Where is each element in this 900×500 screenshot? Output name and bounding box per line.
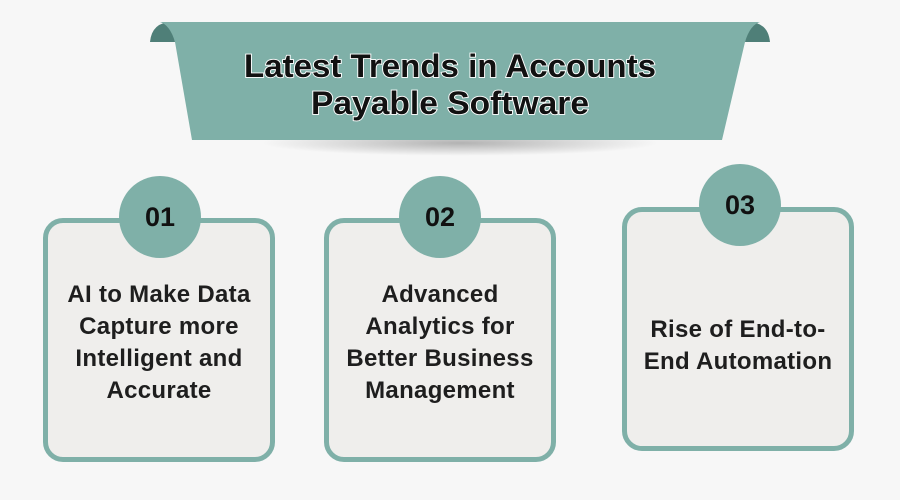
title bbox=[244, 48, 656, 121]
card 2: Management bbox=[365, 377, 515, 404]
card 1: Accurate bbox=[106, 377, 212, 404]
title: Payable Software bbox=[311, 85, 589, 121]
card 3: End Automation bbox=[644, 348, 832, 375]
badge 02 bbox=[399, 176, 481, 258]
card 3: Rise of End-to- bbox=[650, 316, 826, 343]
card 1 bbox=[43, 218, 275, 462]
card 3 bbox=[622, 207, 854, 451]
banner bbox=[150, 22, 770, 140]
title: Latest Trends in Accounts bbox=[244, 48, 656, 84]
card 1: Capture more bbox=[79, 313, 239, 340]
card 2: Analytics for bbox=[365, 313, 515, 340]
card 1: Intelligent and bbox=[75, 345, 243, 372]
card 2: Advanced bbox=[381, 281, 499, 308]
card 2 bbox=[324, 218, 556, 462]
badge 02: 02 bbox=[425, 202, 455, 232]
badge 01 bbox=[119, 176, 201, 258]
badge 03: 03 bbox=[725, 190, 755, 220]
badge 01: 01 bbox=[145, 202, 175, 232]
badge 03 bbox=[699, 164, 781, 246]
banner shadow bbox=[260, 130, 660, 156]
card 1: AI to Make Data bbox=[67, 281, 251, 308]
card 2: Better Business bbox=[346, 345, 534, 372]
